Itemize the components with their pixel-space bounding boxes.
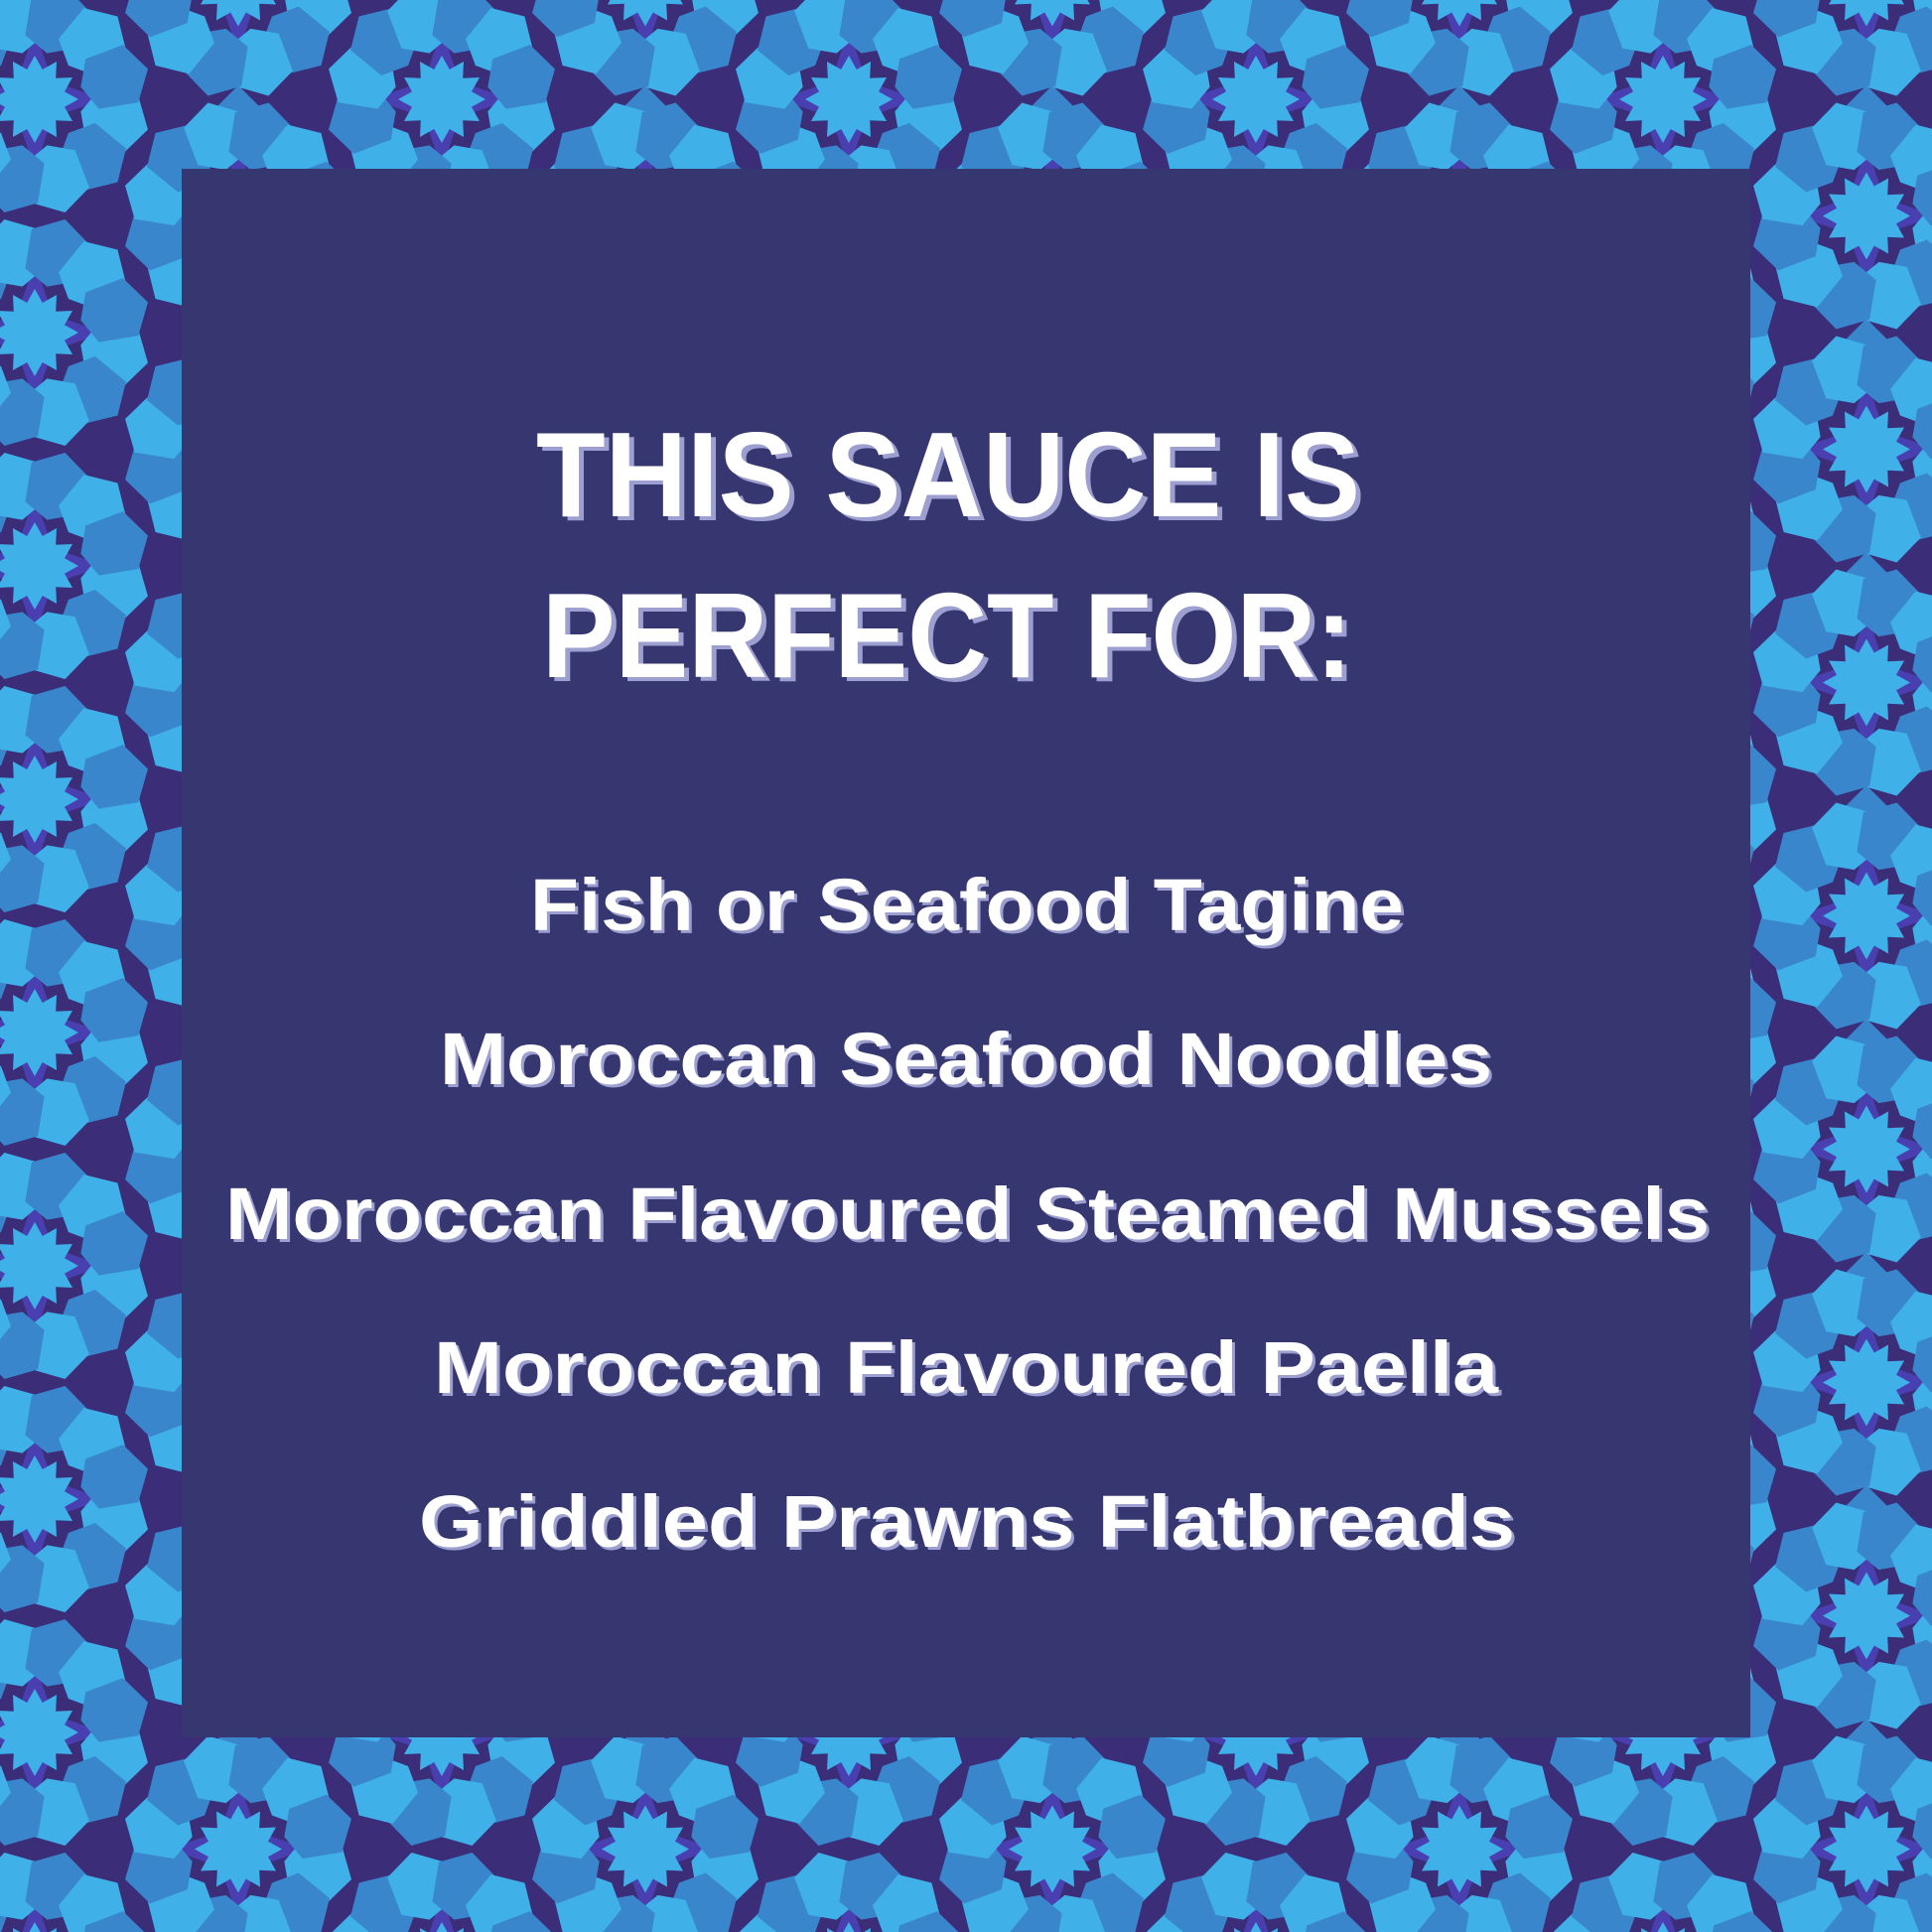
title: THIS SAUCE IS	[536, 407, 1360, 542]
title: THIS SAUCE IS	[541, 411, 1365, 546]
item 3: Moroccan Flavoured Steamed Mussels	[225, 1173, 1710, 1255]
title	[536, 407, 1365, 707]
list of dishes	[225, 864, 1713, 1566]
list of dishes: Fish or Seafood Tagine	[533, 867, 1407, 949]
item 2: Moroccan Seafood Noodles	[440, 1018, 1492, 1100]
title: PERFECT FOR:	[547, 572, 1357, 707]
panel: main content box	[182, 169, 1750, 1737]
title: PERFECT FOR:	[542, 568, 1352, 703]
list of dishes: Moroccan Flavoured Steamed Mussels	[228, 1175, 1713, 1258]
list of dishes: Moroccan Flavoured Paella	[437, 1329, 1502, 1412]
item 4: Moroccan Flavoured Paella	[434, 1326, 1499, 1409]
item 1: Fish or Seafood Tagine	[530, 864, 1404, 946]
list of dishes: Griddled Prawns Flatbreads	[422, 1483, 1518, 1566]
list of dishes: Moroccan Seafood Noodles	[443, 1021, 1495, 1103]
item 5: Griddled Prawns Flatbreads	[419, 1480, 1515, 1563]
